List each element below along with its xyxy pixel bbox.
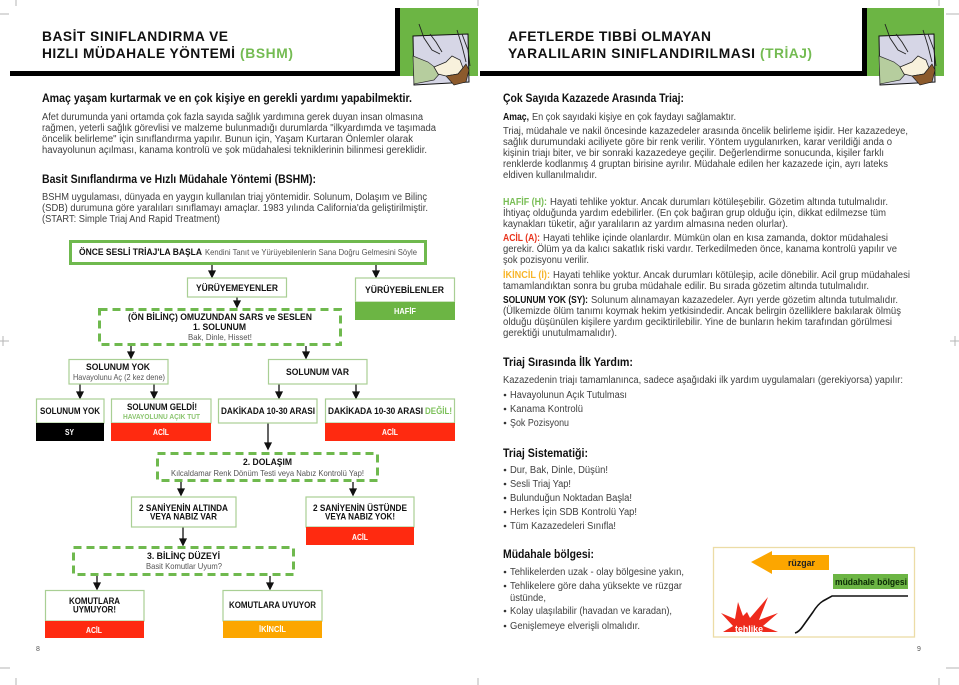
box: breathing restored, urgent (111, 399, 211, 441)
box: start with voice triage: Kendini Tanıt ve Yürüyebilenlerin Sana Doğru Gelmesini Söyle (205, 247, 417, 257)
box: does not obey, urgent: KOMUTLARA (69, 596, 120, 607)
text block: BSHM description: BSHM uygulaması, dünyada en yaygın kullanılan triaj yöntemidir. Solunum, Dolaşım ve Bilinç (42, 192, 427, 203)
text block: BSHM description: (SDB) durumuna göre yaralıları sınıflamayı amaçlar. 1983 yılında California'da geliştirilmiştir. (42, 203, 428, 214)
category: urgent (503, 233, 898, 266)
text block: triage system: Triaj Sistematiği: (503, 448, 588, 460)
text block: response zone (503, 549, 684, 632)
box: does not obey, urgent: ACİL (86, 625, 102, 635)
title: Triaj: YARALILARIN SINIFLANDIRILMASI (508, 46, 755, 61)
text block: response zone: Tehlikelerden uzak - olay bölgesine yakın, (510, 567, 684, 578)
text block: triage system (503, 448, 637, 532)
category: no breathing: olduğu düşünülen kişilere yardım geciktirilebilir. Yine de bunların hekim tarafından görülmesi (503, 317, 892, 328)
category: minor: İhtiyaç olduğunda yardım edebilirler. (En çok bağıran grup olduğu için, dikkat edilmezse tüm (503, 208, 886, 219)
arrows: flow connectors (77, 265, 379, 589)
box: can walk, minor: YÜRÜYEBİLENLER (365, 285, 444, 296)
box: can walk, minor (355, 278, 455, 320)
box: obeys, delayed: İKİNCİL (259, 624, 286, 634)
step: 3. consciousness: 3. BİLİNÇ DÜZEYİ (147, 551, 220, 562)
icon: hazard explosion: tehlike (735, 624, 763, 634)
text block: first aid during triage: Triaj Sırasında İlk Yardım: (503, 356, 633, 369)
text block: triage categories (503, 197, 910, 339)
category: delayed: Hayati tehlike yoktur. Ancak durumları kötüleşip, acile dönebilir. Acil grup müdahalesi (553, 270, 910, 281)
label: response zone (833, 574, 908, 589)
text block: triage among many casualties: eldiven kullanılmalıdır. (503, 170, 597, 181)
arrow: wind direction (751, 551, 829, 574)
flowchart: START triage (36, 242, 455, 638)
title: Triaj (508, 28, 812, 61)
title: Triaj: (TRİAJ) (760, 45, 812, 61)
slope line (795, 596, 908, 633)
text block: response zone: Kolay ulaşılabilir (havadan ve karadan), (510, 606, 672, 617)
box: breathing: SOLUNUM VAR (286, 367, 349, 378)
icon: airway check illustration (413, 24, 470, 85)
step: 1. breathing (100, 310, 340, 344)
box: breathing restored, urgent: ACİL (153, 427, 169, 437)
box: under 2 seconds: VEYA NABIZ VAR (150, 512, 217, 522)
title: BSHM (42, 28, 293, 61)
text block: triage among many casualties: sağlık durumundaki aciliyete göre bir renk verilir. Yöntem uygulanırken, karar verildiği anda o (503, 137, 893, 148)
category: minor (503, 197, 888, 230)
arrow: wind direction: rüzgar (788, 558, 815, 569)
box: over 2 seconds, urgent: ACİL (352, 532, 368, 542)
text block: triage among many casualties: Amaç, (503, 112, 529, 123)
box: no breathing, black tag: SOLUNUM YOK (40, 406, 100, 417)
text block: purpose: rağmen, yeterli sağlık görevlisi ve malzeme bulunmadığı durumlarda "ilkyardımda ve taşımada (42, 123, 437, 134)
box: obeys, delayed (223, 590, 322, 638)
box: breathing restored, urgent: SOLUNUM GELDİ! (127, 402, 197, 413)
category: minor: kaynakları tüketir, ağır yaralıların az yardım almasına neden olurlar). (503, 219, 788, 230)
label: response zone: müdahale bölgesi (835, 577, 907, 588)
category: minor: HAFİF (H): (503, 197, 547, 208)
category: no breathing: (Ülkemizde ölüm tanımı koymak hekim yetkisindedir. Ancak belirgin özelliklere bakılarak ölmüş (503, 306, 901, 317)
step: 2. circulation: Kılcaldamar Renk Dönüm Testi veya Nabız Kontrolü Yap! (171, 468, 364, 478)
panel: right page header (480, 8, 944, 85)
box: rate not 10-30, urgent: DEĞİL! (425, 405, 452, 417)
text block: purpose (42, 93, 437, 156)
text block: triage system: Bulunduğun Noktadan Başla! (510, 493, 632, 504)
text block: response zone: Müdahale bölgesi: (503, 549, 594, 561)
page number 8: 8 (36, 646, 40, 653)
title: BSHM: HIZLI MÜDAHALE YÖNTEMİ (42, 45, 235, 61)
box: can walk, minor: HAFİF (394, 306, 416, 316)
box: cannot walk (188, 278, 286, 297)
icon: airway check illustration (879, 24, 936, 85)
box: start with voice triage (70, 242, 426, 264)
diagram: response zone location (714, 548, 914, 637)
text block: purpose: Amaç yaşam kurtarmak ve en çok kişiye en gerekli yardımı yapabilmektir. (42, 93, 412, 105)
box: no breathing (69, 360, 168, 384)
box: no breathing, black tag: SY (65, 427, 74, 437)
box: does not obey, urgent (45, 590, 144, 638)
title: BSHM: (BSHM) (240, 46, 293, 61)
box: over 2 seconds, urgent (306, 497, 414, 545)
box: start with voice triage: ÖNCE SESLİ TRİAJ'LA BAŞLA (79, 247, 202, 258)
title: Triaj: AFETLERDE TIBBİ OLMAYAN (508, 28, 711, 44)
category: delayed: tamamlandıktan sonra bu gruba müdahale edilir. Bu sırada gözetim altında tutulmalıdır. (503, 281, 869, 292)
text block: BSHM description (42, 174, 428, 225)
category: no breathing: gerektiği unutulmamalıdır). (503, 328, 617, 339)
text block: triage system: Tüm Kazazedeleri Sınıfla! (510, 521, 616, 532)
text block: triage among many casualties: En çok sayıdaki kişiye en çok faydayı sağlamaktır. (532, 112, 736, 123)
text block: response zone: Genişlemeye elverişli olmalıdır. (510, 621, 640, 632)
text block: BSHM description: (START: Simple Triaj And Rapid Treatment) (42, 214, 220, 225)
step: 1. breathing: 1. SOLUNUM (193, 322, 246, 333)
text block: triage among many casualties: Çok Sayıda Kazazede Arasında Triaj: (503, 93, 684, 105)
step: 2. circulation: 2. DOLAŞIM (243, 457, 292, 468)
text block: purpose: havayolunun açılması, kanama kontrolü ve şok müdahalesi tekniklerinin bilinmesi gereklidir. (42, 145, 427, 156)
box: breathing (268, 360, 367, 384)
category: delayed: İKİNCİL (İ): (503, 270, 550, 281)
step: 2. circulation (158, 454, 378, 480)
box: under 2 seconds (132, 497, 236, 527)
box: no breathing: SOLUNUM YOK (86, 362, 150, 373)
text block: triage among many casualties: Triaj, müdahale ve nakil öncesinde kazazedeler arasında öncelik belirleme işidir. Her kazazedeye, (503, 126, 908, 137)
icon: hazard explosion (721, 597, 778, 634)
box: does not obey, urgent: UYMUYOR! (73, 604, 116, 616)
text block: triage system: Sesli Triaj Yap! (510, 479, 571, 490)
category: no breathing: SOLUNUM YOK (SY): (503, 295, 588, 306)
step: 1. breathing: Bak, Dinle, Hisset! (188, 332, 252, 342)
box: over 2 seconds, urgent: 2 SANİYENİN ÜSTÜNDE (313, 503, 407, 514)
text block: first aid during triage: Kanama Kontrolü (510, 404, 583, 415)
text block: purpose: öncelik belirleme" için sınıflandırma yapılır. Bunun için, Yaşam Kurtaran Önlemler olarak (42, 134, 413, 145)
box: obeys, delayed: KOMUTLARA UYUYOR (229, 600, 316, 611)
category: urgent: Hayati tehlike içinde olanlardır. Mümkün olan en kısa zamanda, doktor müdahalesi (543, 233, 888, 244)
panel: left page header (10, 8, 478, 85)
text block: first aid during triage: Kazazedenin triajı tamamlanınca, sadece aşağıdaki ilk yardım uygulamaları (gerekiyorsa) yapılır: (503, 375, 903, 386)
box: rate not 10-30, urgent: DAKİKADA 10-30 ARASI (328, 406, 423, 417)
title: BSHM: BASİT SINIFLANDIRMA VE (42, 28, 228, 44)
text block: triage system: Dur, Bak, Dinle, Düşün! (510, 465, 608, 476)
box: over 2 seconds, urgent: VEYA NABIZ YOK! (325, 512, 395, 522)
box: rate not 10-30, urgent (325, 399, 455, 441)
page number 9: 9 (917, 646, 921, 653)
text block: BSHM description: Basit Sınıflandırma ve Hızlı Müdahale Yöntemi (BSHM): (42, 174, 316, 186)
category: urgent: gerekir. Ölüm ya da kalıcı sakatlık riski vardır. Terkedilmeden önce, kanama kontrolü yapılır ve (503, 244, 898, 255)
box: no breathing, black tag (36, 399, 104, 441)
step: 3. consciousness (74, 548, 294, 574)
text block: triage among many casualties (503, 93, 908, 181)
text block: first aid during triage: Havayolunun Açık Tutulması (510, 390, 627, 401)
text block: first aid during triage (503, 356, 903, 429)
text block: first aid during triage: Şok Pozisyonu (510, 418, 569, 429)
text block: triage among many casualties: kişinin triajı biter, ve bir sonraki kazazedeye geçilir. Değerlendirme sonucunda, kişiler farklı (503, 148, 884, 159)
category: no breathing: Solunum alınamayan kazazedeler. Ayrı yerde gözetim altında tutulmalıdır. (591, 295, 898, 306)
category: delayed (503, 270, 910, 292)
box: rate not 10-30, urgent: ACİL (382, 427, 398, 437)
text block: triage among many casualties: renklerde kodlanmış 4 gruptan birisine ayrılır. Müdahale edilen her kazazede için, ayrı lateks (503, 159, 888, 170)
box: rate 10-30: DAKİKADA 10-30 ARASI (221, 406, 315, 417)
text block: response zone: Tehlikelere göre daha yüksekte ve rüzgar (510, 581, 683, 592)
category: no breathing (503, 295, 901, 339)
category: minor: Hayati tehlike yoktur. Ancak durumları kötüleşebilir. Gözetim altında tutulmalıdır. (550, 197, 888, 208)
category: urgent: şok pozisyonu verilir. (503, 255, 589, 266)
text block: purpose: Afet durumunda yani ortamda çok fazla sayıda sağlık yardımına gerek duyan insan olmasına (42, 112, 424, 123)
text block: triage system: Herkes İçin SDB Kontrolü Yap! (510, 507, 637, 518)
text block: response zone: üstünde, (510, 593, 546, 604)
category: urgent: ACİL (A): (503, 233, 540, 244)
box: rate 10-30 (218, 399, 317, 423)
box: under 2 seconds: 2 SANİYENİN ALTINDA (139, 503, 228, 514)
box: no breathing: Havayolunu Aç (2 kez dene) (73, 372, 165, 382)
box: breathing restored, urgent: HAVAYOLUNU AÇIK TUT (123, 412, 200, 421)
step: 1. breathing: (ÖN BİLİNÇ) OMUZUNDAN SARS ve SESLEN (128, 312, 312, 323)
step: 3. consciousness: Basit Komutlar Uyum? (146, 561, 222, 571)
box: cannot walk: YÜRÜYEMEYENLER (196, 283, 278, 294)
